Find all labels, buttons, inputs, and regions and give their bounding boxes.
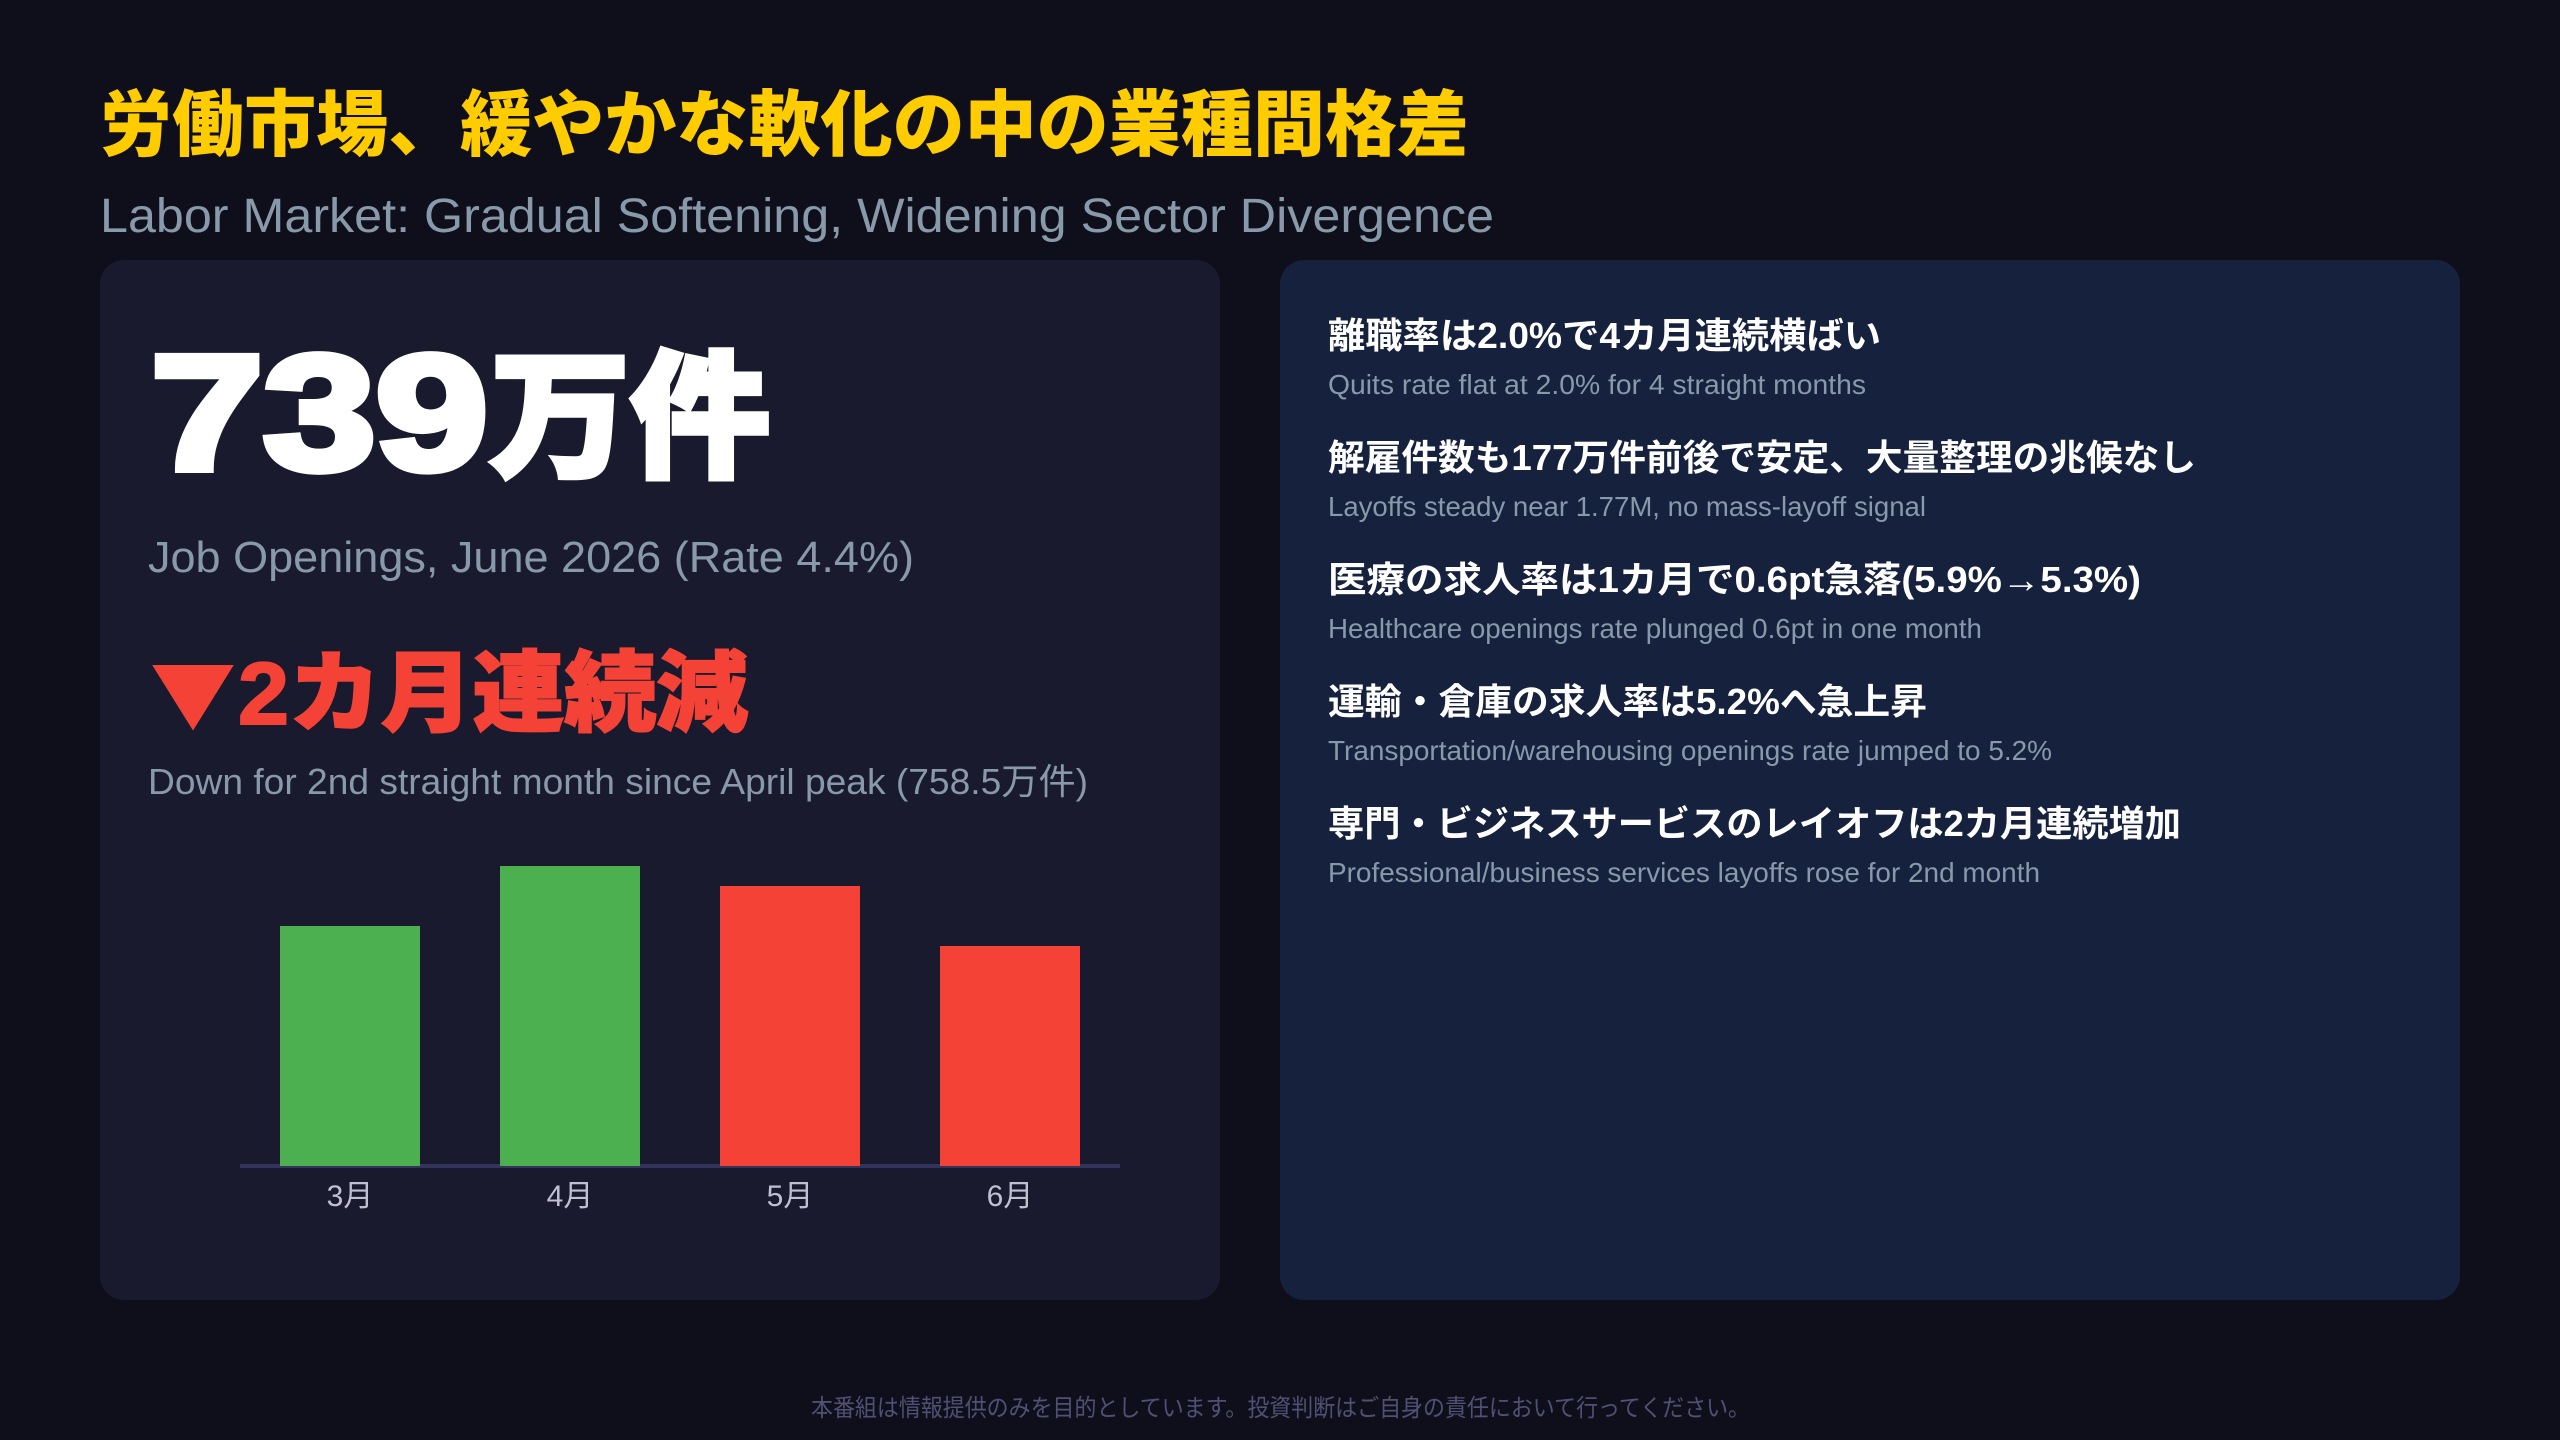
subtitle: Labor Market: Gradual Softening, Widening Sector Divergence <box>100 190 1494 243</box>
item: healthcare: 医療の求人率は1カ月で0.6pt急落(5.9%→5.3%) <box>1328 559 2141 600</box>
bar: June <box>940 946 1080 1166</box>
callout: down two months: 2カ月連続減 <box>238 644 748 743</box>
bar: March <box>280 926 420 1166</box>
item: quits rate: 離職率は2.0%で4カ月連続横ばい <box>1328 315 1881 356</box>
item: transportation <box>1328 681 2052 766</box>
bar chart <box>240 866 1120 1213</box>
item: professional services: 専門・ビジネスサービスのレイオフは2カ月連続増加 <box>1328 803 2181 844</box>
item: healthcare: Healthcare openings rate plunged 0.6pt in one month <box>1328 613 1982 644</box>
item: quits rate <box>1328 315 1881 400</box>
big number: 739万件: 万件 <box>490 342 770 496</box>
caption: job openings rate: Job Openings, June 2026 (Rate 4.4%) <box>148 533 914 582</box>
label: 5月: 5月 <box>767 1180 813 1213</box>
title: 労働市場、緩やかな軟化の中の業種間格差 <box>100 86 1469 166</box>
item: layoffs <box>1328 437 2196 522</box>
big number: 739万件: 739 <box>151 321 488 504</box>
item: transportation: Transportation/warehousing openings rate jumped to 5.2% <box>1328 735 2052 766</box>
callout: down two months: ▼ <box>124 628 262 753</box>
label: 6月: 6月 <box>987 1180 1033 1213</box>
item: healthcare <box>1328 559 2141 644</box>
bar: April <box>500 866 640 1166</box>
item: professional services: Professional/business services layoffs rose for 2nd month <box>1328 857 2040 888</box>
item: professional services <box>1328 803 2181 888</box>
item: quits rate: Quits rate flat at 2.0% for 4 straight months <box>1328 369 1866 400</box>
label: 3月: 3月 <box>327 1180 373 1213</box>
footer disclaimer: 本番組は情報提供のみを目的としています。投資判断はご自身の責任において行ってください。 <box>811 1395 1750 1422</box>
bar: May <box>720 886 860 1166</box>
item: layoffs: 解雇件数も177万件前後で安定、大量整理の兆候なし <box>1328 437 2196 478</box>
callout: down two months <box>124 628 748 753</box>
caption: down since April peak: Down for 2nd straight month since April peak (758.5万件) <box>148 761 1088 802</box>
big number: 739万件 <box>151 321 770 504</box>
label: 4月: 4月 <box>547 1180 593 1213</box>
panel: key points <box>1280 260 2460 1300</box>
item: transportation: 運輸・倉庫の求人率は5.2%へ急上昇 <box>1328 681 1927 722</box>
item: layoffs: Layoffs steady near 1.77M, no mass-layoff signal <box>1328 491 1926 522</box>
panel: job openings <box>100 260 1220 1300</box>
